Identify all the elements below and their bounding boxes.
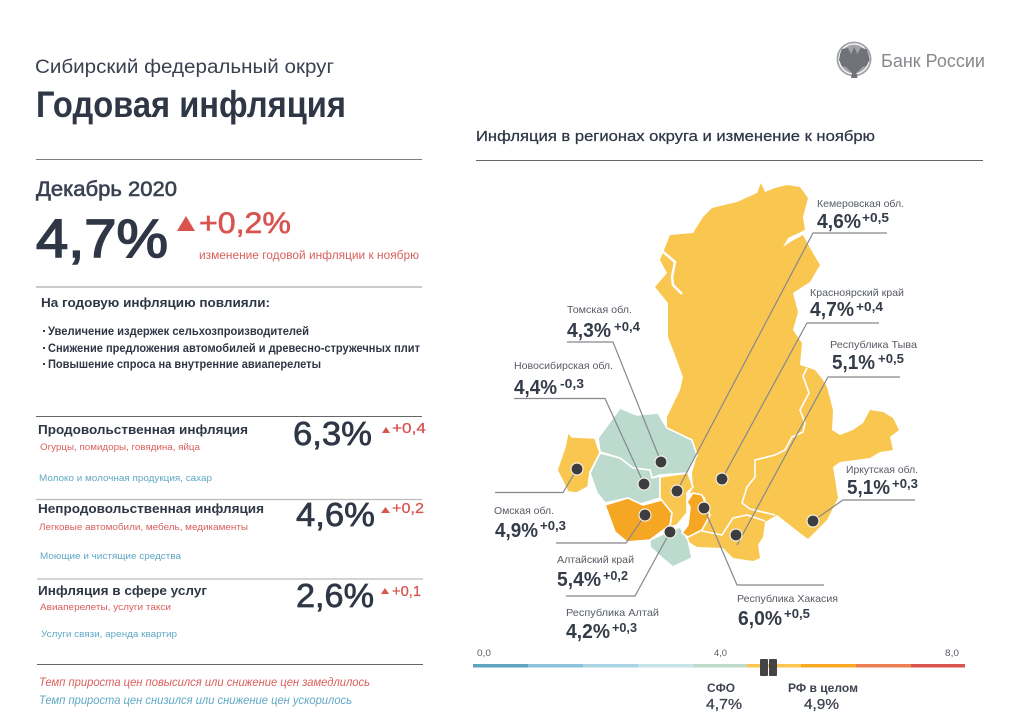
panel: services inflation: 2,6% [296,577,374,614]
panel: services inflation: +0,1 [392,583,421,600]
panel: food inflation: Огурцы, помидоры, говядина, яйца [40,442,200,452]
panel: food inflation: Молоко и молочная продукция, сахар [39,473,212,483]
label: Novosibirsk: Новосибирская обл. [514,360,613,372]
label: Kemerovo: +0,5 [862,210,889,225]
label: Altai krai: 5,4% [557,569,601,591]
label: Tomsk: +0,4 [614,319,641,334]
headline change: +0,2% [199,207,291,240]
region: Tomsk [598,408,697,478]
colour scale bar: 0,0 [477,648,491,659]
panel: food inflation: +0,4 [392,420,426,437]
label: Altai krai: Алтайский край [557,554,634,566]
panel: non-food inflation: Моющие и чистящие средства [40,551,181,561]
label: Tomsk: 4,3% [567,320,611,342]
panel: food inflation [38,415,426,483]
label: Khakassia: 6,0% [738,608,782,630]
label: Khakassia: +0,5 [784,606,810,621]
label: Tyva [830,339,917,374]
panel: non-food inflation: +0,2 [392,500,424,517]
panel: non-food inflation: Непродовольственная инфляция [38,502,264,516]
label: Altai republic: +0,3 [612,620,637,635]
heading: date: Декабрь 2020 [36,178,177,201]
colour scale bar [473,648,965,676]
icon: up triangle [177,216,195,231]
panel: factors: На годовую инфляцию повлияли: [41,295,270,310]
marker label: Russia: РФ в целом [788,681,858,695]
title: Годовая инфляция [36,84,346,125]
label: Novosibirsk [514,360,613,399]
label: Kemerovo: 4,6% [817,211,861,233]
marker label: SFO: 4,7% [706,696,742,713]
subtitle: Сибирский федеральный округ [35,57,334,78]
label: Omsk [494,505,566,542]
label: Omsk: Омская обл. [494,505,554,517]
label: Khakassia [737,593,838,630]
label: Irkutsk: 5,1% [847,477,890,499]
marker label: Russia: 4,9% [804,696,839,713]
region: Altai republic [650,527,692,567]
panel: services inflation: Авиаперелеты, услуги такси [40,602,171,612]
region: Khakassia [682,493,710,537]
label: Kemerovo: Кемеровская обл. [817,198,904,210]
panel: food inflation: Продовольственная инфляция [38,423,248,437]
label: Altai krai: +0,2 [603,568,628,583]
label: Tyva: 5,1% [832,352,875,374]
colour scale bar: 4,0 [714,648,727,659]
label: Altai republic: Республика Алтай [566,607,659,619]
label: Krasnoyarsk: 4,7% [810,299,854,321]
panel: factors [41,295,420,371]
label: Krasnoyarsk: +0,4 [856,299,884,314]
label: Tomsk [567,304,641,342]
label: Khakassia: Республика Хакасия [737,593,838,605]
label: Irkutsk: +0,3 [892,476,918,491]
panel: services inflation: Услуги связи, аренда квартир [41,629,177,639]
panel: services inflation: Инфляция в сфере услуг [38,584,207,598]
label: Irkutsk [846,464,918,499]
marker label: Russia [788,681,858,713]
region: Krasnoyarsk, Irkutsk, Tyva [655,173,899,561]
label: Tomsk: Томская обл. [567,304,632,316]
region: Altai krai [605,498,672,542]
leader lines [495,233,915,596]
label: Krasnoyarsk [810,287,904,321]
legend: red note: Темп прироста цен повысился или снижение цен замедлилось [39,677,370,689]
legend: blue note: Темп прироста цен снизился или снижение цен ускорилось [39,695,352,707]
label: Altai krai [557,554,634,591]
region dots [571,456,819,541]
label: Omsk: +0,3 [540,518,566,533]
panel: non-food inflation [38,496,424,561]
logo: Банк России [836,42,985,78]
label: Tyva: Республика Тыва [830,339,917,351]
logo: Банк России: Банк России [881,51,985,71]
panel: factors: Увеличение издержек сельхозпроизводителей [48,326,309,338]
panel: services inflation [38,577,421,639]
panel: non-food inflation: Легковые автомобили, мебель, медикаменты [39,522,248,532]
change caption: изменение годовой инфляции к ноябрю [199,248,419,262]
panel: food inflation: 6,3% [293,415,372,452]
headline value: 4,7% [36,209,168,269]
label: Novosibirsk: 4,4% [514,377,557,399]
label: Krasnoyarsk: Красноярский край [810,287,904,299]
panel: factors: Повышение спроса на внутренние авиаперелеты [48,359,321,371]
region: Omsk [557,432,600,493]
label: Altai republic: 4,2% [566,621,610,643]
colour scale bar: 8,0 [945,648,959,659]
label: Tyva: +0,5 [878,351,904,366]
panel: factors: Снижение предложения автомобилей и древесно-стружечных плит [48,343,420,355]
marker label: SFO [706,681,742,713]
marker label: SFO: СФО [707,681,735,695]
panel: non-food inflation: 4,6% [296,496,375,533]
label: Omsk: 4,9% [495,520,538,542]
region: Kemerovo [660,473,693,527]
region: Novosibirsk [590,453,660,505]
label: Altai republic [566,607,659,643]
heading: regions: Инфляция в регионах округа и изменение к ноябрю [476,128,875,145]
label: Irkutsk: Иркутская обл. [846,464,918,476]
map of Siberian federal district [557,173,899,567]
label: Novosibirsk: -0,3 [560,376,584,391]
label: Kemerovo [817,198,904,233]
